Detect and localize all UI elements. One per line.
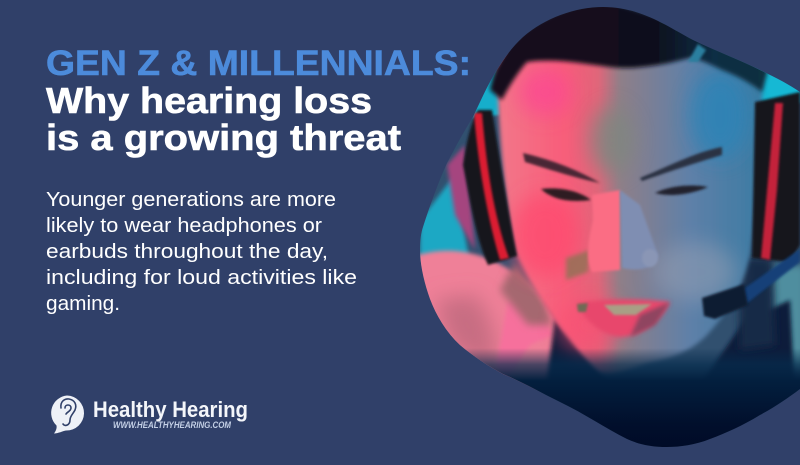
headset microphone boom (702, 249, 800, 319)
headset: right ear cup (752, 92, 800, 262)
photo backdrop (430, 116, 800, 360)
face (497, 55, 764, 374)
left shoulder and arm in pink light (415, 251, 565, 390)
logo URL: WWW.HEALTHYHEARING.COM (113, 420, 231, 430)
body paragraph: Younger generations are more (46, 189, 336, 211)
logo wordmark: Healthy Hearing (93, 397, 248, 422)
nose (588, 190, 658, 272)
body paragraph: including for loud activities like (46, 267, 357, 289)
body paragraph: gaming. (46, 293, 120, 315)
right neck and ear area (738, 258, 775, 350)
hair: blue side highlight (688, 44, 706, 62)
body paragraph (46, 189, 357, 315)
left eyebrow (523, 153, 600, 183)
right eyebrow (640, 147, 722, 181)
photo: young man gaming in a headset, clipped to an organic blob (420, 7, 800, 447)
body paragraph: earbuds throughout the day, (46, 241, 328, 263)
title line 1: GEN Z & MILLENNIALS: (46, 44, 471, 83)
title (46, 44, 471, 158)
dark neck shadow (546, 298, 796, 379)
mouth (577, 299, 670, 337)
logo: Healthy Hearing (51, 396, 248, 434)
left eye (541, 188, 591, 201)
title line 3: is a growing threat (46, 117, 401, 158)
icon: speech bubble with ear (51, 396, 84, 434)
forehead and cheek lighting (511, 68, 750, 353)
right eye (655, 185, 708, 195)
title line 2: Why hearing loss (46, 80, 372, 121)
dark lower fade (466, 349, 800, 447)
hair (490, 0, 768, 100)
body paragraph: likely to wear headphones or (46, 215, 322, 237)
backdrop: cyan light patches (420, 65, 800, 370)
headset: left ear cup (463, 110, 517, 265)
